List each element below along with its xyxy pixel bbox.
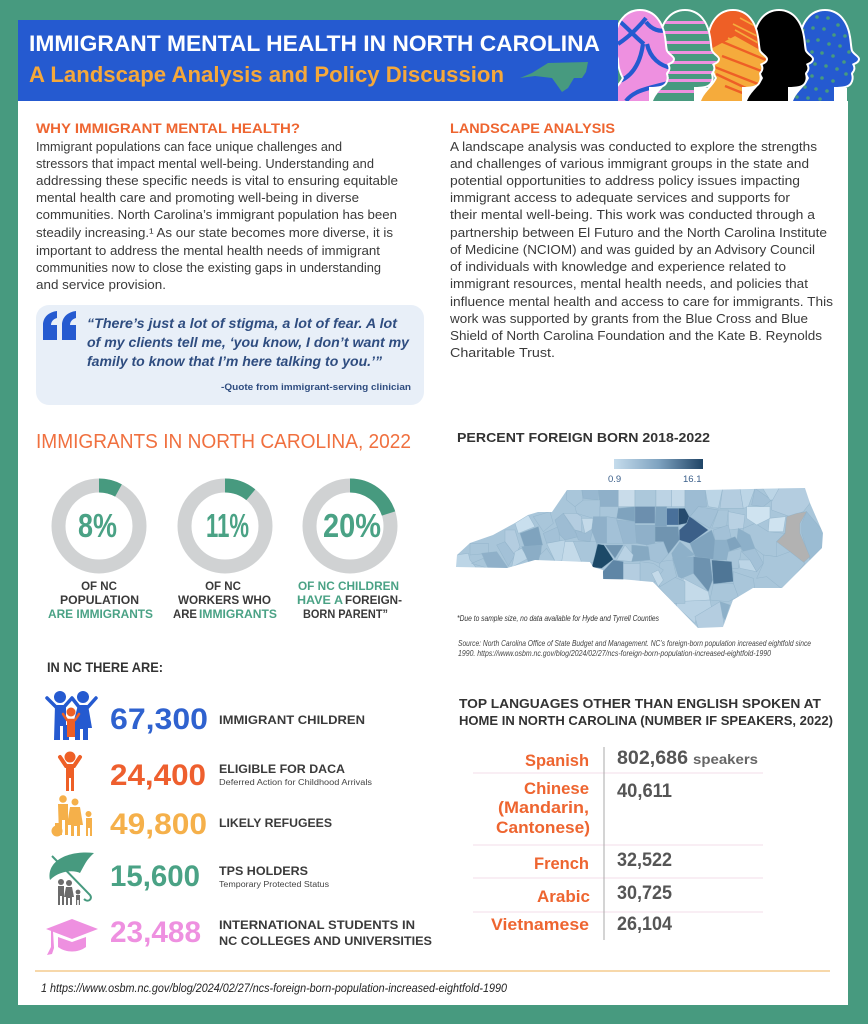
- heading: top languages: HOME IN NORTH CAROLINA (NUMBER IF SPEAKERS, 2022): [459, 714, 833, 728]
- value: 24,400: [110, 759, 206, 792]
- donut: 20 percent: [297, 486, 402, 621]
- footnote: 1 https://www.osbm.nc.gov/blog/2024/02/27/ncs-foreign-born-population-increased-eightfold-1990: [41, 983, 508, 995]
- choropleth map of NC counties: [453, 487, 827, 630]
- row: Chinese: [496, 779, 672, 837]
- body text: communities. North Carolina’s immigrant population has been: [36, 207, 397, 222]
- row: Vietnamese: Vietnamese: [491, 915, 589, 934]
- row: Vietnamese: 26,104: [617, 914, 672, 935]
- heading: top languages: TOP LANGUAGES OTHER THAN ENGLISH SPOKEN AT: [459, 697, 821, 711]
- donut: 8 percent: 8%: [78, 507, 117, 544]
- row: Vietnamese: [491, 914, 672, 935]
- body text: [449, 139, 834, 360]
- row: Arabic: [537, 883, 672, 906]
- title: IMMIGRANT MENTAL HEALTH IN NORTH CAROLINA: [29, 31, 600, 56]
- body text: steadily increasing.¹ As our state becomes more diverse, it is: [36, 225, 394, 240]
- donut: 8 percent: OF NC: [81, 581, 117, 593]
- donut: 8 percent: ARE IMMIGRANTS: [48, 609, 153, 621]
- value: 67,300: [110, 703, 208, 736]
- body text: Immigrant populations can face unique challenges and: [36, 139, 342, 154]
- row: Spanish: Spanish: [525, 751, 589, 770]
- subtitle: A Landscape Analysis and Policy Discussion: [29, 62, 504, 87]
- stat: TPS holders: Temporary Protected Status: [219, 880, 329, 889]
- stat: DACA: [60, 752, 372, 792]
- value: 23,488: [110, 916, 201, 949]
- icon: graduation cap: [46, 919, 98, 955]
- body text: stressors that impact mental well-being. Understanding and: [36, 156, 374, 171]
- row: Spanish: 802,686: [617, 748, 688, 769]
- heading: LANDSCAPE ANALYSIS: [450, 120, 615, 136]
- body text: of Medicine (NCIOM) and was guided by an Advisory Council: [450, 242, 815, 257]
- body text: immigrant access to adequate services and supports for: [450, 190, 791, 205]
- body text: Charitable Trust.: [450, 345, 555, 360]
- donut: 20 percent: FOREIGN-: [345, 595, 402, 607]
- map legend: [608, 459, 703, 485]
- donut: 8 percent: POPULATION: [60, 595, 139, 607]
- body text: [36, 139, 398, 292]
- icon: umbrella over family: [50, 852, 94, 905]
- icon: quotation marks: [43, 311, 76, 340]
- illustration: five head silhouettes: [618, 9, 860, 101]
- row: Chinese: Chinese: [524, 779, 589, 798]
- stat: DACA: Deferred Action for Childhood Arrivals: [219, 778, 372, 787]
- donut: 11 percent: WORKERS WHO: [178, 595, 271, 607]
- body text: communities now to close the existing gaps in understanding: [36, 260, 381, 275]
- head: black: [747, 11, 812, 101]
- icon: North Carolina silhouette: [520, 62, 588, 92]
- section: landscape analysis: [449, 120, 834, 360]
- row: Spanish: speakers: [693, 751, 758, 767]
- table: top languages: [473, 747, 763, 940]
- donut: 20 percent: HAVE A: [297, 595, 343, 607]
- map legend: 0.9: [608, 474, 621, 485]
- donut: 11 percent: OF NC: [205, 581, 241, 593]
- label: ELIGIBLE FOR DACA: [219, 764, 345, 776]
- body text: addressing these specific needs is vital to ensuring equitable: [36, 173, 398, 188]
- heading: top languages: [459, 697, 833, 728]
- donut: 20 percent: BORN PARENT”: [303, 609, 388, 621]
- head: blue dots: [790, 8, 860, 103]
- body text: and challenges of various immigrant groups in the state and: [450, 156, 809, 171]
- map source: [458, 639, 811, 658]
- row: French: French: [534, 854, 589, 873]
- row: Chinese: Cantonese): [496, 818, 590, 837]
- donut: 20 percent: 20%: [323, 507, 381, 544]
- quote text: “There’s just a lot of stigma, a lot of fear. A lot: [87, 316, 398, 331]
- row: Chinese: 40,611: [617, 781, 672, 802]
- heading: in NC there are: IN NC THERE ARE:: [47, 659, 163, 675]
- donut: 11 percent: 11%: [206, 507, 249, 544]
- heading: percent foreign born: PERCENT FOREIGN BORN 2018-2022: [457, 430, 710, 445]
- stat: international students: NC COLLEGES AND UNIVERSITIES: [219, 936, 432, 948]
- value: 15,600: [110, 860, 200, 893]
- section: why immigrant mental health: [36, 120, 398, 292]
- row: French: 32,522: [617, 850, 672, 871]
- quote text: family to know that I’m here talking to you.’”: [87, 354, 382, 369]
- body text: Shield of North Carolina Foundation and the Kate B. Reynolds: [450, 328, 823, 343]
- head: green and pink stripes: [653, 9, 720, 101]
- donut: 8 percent: [48, 486, 153, 621]
- quote attribution: -Quote from immigrant-serving clinician: [221, 382, 411, 393]
- label: TPS HOLDERS: [219, 866, 308, 878]
- donut: 20 percent: OF NC CHILDREN: [298, 581, 399, 593]
- row: Spanish: [525, 748, 758, 770]
- label: INTERNATIONAL STUDENTS IN: [219, 920, 415, 932]
- body text: their mental well-being. This work was conducted through a: [450, 207, 816, 222]
- label: LIKELY REFUGEES: [219, 818, 332, 830]
- quote text: [87, 316, 411, 369]
- head: pink with blue swirls: [618, 9, 675, 101]
- body text: partnership between El Futuro and the North Carolina Institute: [450, 225, 827, 240]
- body text: important to address the mental health needs of immigrant: [36, 243, 380, 258]
- icon: refugee family: [52, 795, 92, 836]
- map source: 1990. https://www.osbm.nc.gov/blog/2024/02/27/ncs-foreign-born-population-increased-eightfold-1990: [458, 649, 771, 658]
- body text: potential opportunities to address policy issues impacting: [450, 173, 800, 188]
- body text: work was supported by grants from the Blue Cross and Blue: [449, 311, 808, 326]
- heading: WHY IMMIGRANT MENTAL HEALTH?: [36, 120, 300, 136]
- row: French: [534, 850, 672, 873]
- body text: of individuals with knowledge and experience related to: [450, 259, 786, 274]
- body text: immigrant resources, mental health needs, and policies that: [450, 276, 808, 291]
- icon: family with raised arms: [47, 691, 96, 740]
- body text: and service provision.: [36, 277, 166, 292]
- header banner: [18, 20, 618, 101]
- donut: 11 percent: ARE: [173, 609, 197, 621]
- map legend: 16.1: [683, 474, 702, 485]
- row: Arabic: Arabic: [537, 887, 590, 906]
- stat: TPS holders: [50, 852, 329, 905]
- map note: *Due to sample size, no data available for Hyde and Tyrrell Counties: [457, 614, 659, 623]
- label: IMMIGRANT CHILDREN: [219, 715, 365, 727]
- icon: person with raised arms: [60, 752, 80, 791]
- callout: clinician quote: [36, 305, 424, 405]
- row: Arabic: 30,725: [617, 883, 672, 904]
- donut: 11 percent: IMMIGRANTS: [199, 609, 277, 621]
- stat: refugees: [52, 795, 332, 841]
- body text: influence mental health and access to care for immigrants. This: [450, 294, 834, 309]
- body text: mental health care and promoting well-being in diverse: [36, 190, 359, 205]
- body text: A landscape analysis was conducted to explore the strengths: [450, 139, 818, 154]
- heading: immigrants in NC: IMMIGRANTS IN NORTH CAROLINA, 2022: [36, 431, 411, 453]
- row: Chinese: (Mandarin,: [498, 798, 589, 817]
- value: 49,800: [110, 808, 207, 841]
- quote text: of my clients tell me, ‘you know, I don’t want my: [87, 335, 411, 350]
- white strip under the head necks: [618, 88, 847, 102]
- donut: 11 percent: [173, 486, 277, 621]
- stat: international students: [46, 916, 432, 955]
- head: orange and yellow brush: [701, 9, 768, 101]
- stat: immigrant children: [47, 691, 365, 740]
